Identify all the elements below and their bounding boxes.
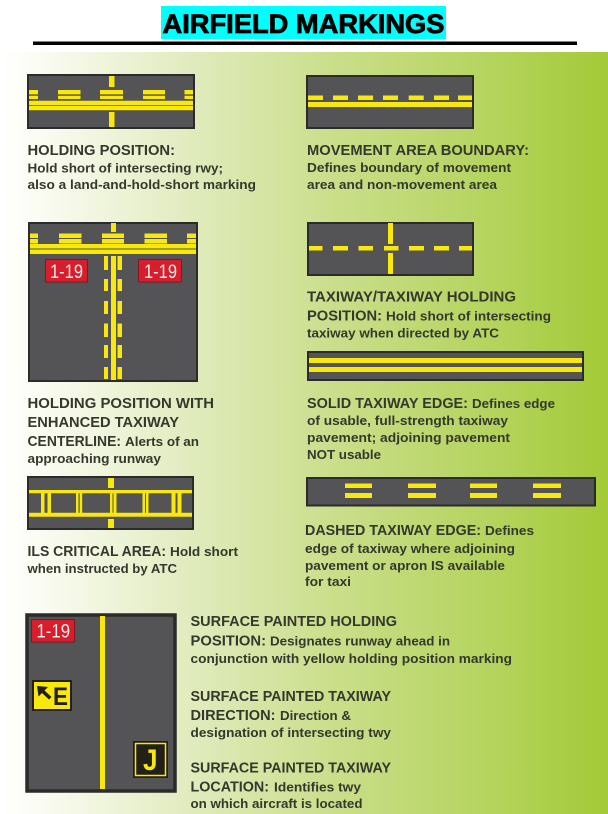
text: taxiway/taxiway holding position: TAXIWAY/TAXIWAY HOLDING [307,290,516,306]
marking diagram: solid taxiway edge [308,352,583,380]
text: movement area boundary: area and non-movement area [307,177,498,192]
marking diagram: enhanced taxiway centerline [29,223,197,381]
marking diagram: holding position [28,75,194,128]
text: solid taxiway edge: pavement; adjoining pavement [307,430,511,445]
text: taxiway/taxiway holding position [307,290,551,340]
text: movement area boundary [307,143,529,192]
title rule [33,42,577,45]
panel: taxiway/taxiway holding position [307,223,551,340]
sign: taxiway direction E: E [53,683,68,711]
panel: movement area boundary [307,76,529,192]
marking diagram: taxiway holding position [308,223,473,275]
text: movement area boundary: Defines boundary of movement [307,160,512,175]
text: surface painted taxiway direction: DIRECTION: [190,708,276,724]
panel: dashed taxiway edge [305,478,595,589]
text: surface painted taxiway direction: designation of intersecting twy [190,725,392,740]
sign: runway 1-19 left: 1-19 [50,261,83,283]
text: movement area boundary: MOVEMENT AREA BOUNDARY: [307,143,529,159]
text: taxiway/taxiway holding position: Hold short of intersecting [386,308,551,324]
text: holding position with enhanced taxiway centerline: ENHANCED TAXIWAY [28,415,179,431]
panel: holding position with enhanced taxiway centerline [28,223,214,466]
text: holding position: Hold short of intersecting rwy; [28,160,223,176]
text: solid taxiway edge: of usable, full-strength taxiway [307,413,509,428]
text: taxiway/taxiway holding position: taxiway when directed by ATC [307,326,500,340]
text: surface painted holding position: POSITION: [190,634,266,650]
text: holding position with enhanced taxiway centerline [28,396,214,466]
text: holding position [28,143,256,192]
marking diagram: dashed taxiway edge [307,478,595,506]
text: solid taxiway edge [307,396,555,462]
text: holding position with enhanced taxiway centerline: CENTERLINE: [28,434,121,450]
text: ILS critical area [26,544,239,576]
text: holding position with enhanced taxiway centerline: Alerts of an [125,434,199,449]
text: holding position: HOLDING POSITION: [28,143,175,159]
sign: taxiway location J: J [143,744,158,777]
marking diagram: movement area boundary [307,76,473,128]
text: surface painted holding position: SURFACE PAINTED HOLDING [190,614,397,630]
text: dashed taxiway edge [305,523,534,589]
title: AIRFIELD MARKINGS [162,9,444,39]
panel: surface painted markings [27,614,512,811]
diagram: surface painted markings [27,615,175,791]
taxiway centerline [100,616,105,789]
text: surface painted taxiway location: on which aircraft is located [190,796,363,811]
text: dashed taxiway edge: DASHED TAXIWAY EDGE: [305,523,481,539]
sign: taxiway direction E [33,681,71,711]
panel: solid taxiway edge [307,352,583,462]
text: dashed taxiway edge: pavement or apron IS available [305,558,505,573]
text: solid taxiway edge: SOLID TAXIWAY EDGE: [307,396,468,412]
text: ILS critical area: Hold short [170,544,239,559]
text: surface painted taxiway location: Identifies twy [274,780,362,794]
text: solid taxiway edge: NOT usable [307,447,381,462]
text: surface painted holding position [190,614,512,666]
text: holding position with enhanced taxiway centerline: approaching runway [28,451,162,466]
text: surface painted holding position: Designates runway ahead in [270,634,450,648]
text: holding position with enhanced taxiway centerline: HOLDING POSITION WITH [28,396,214,412]
panel: ILS critical area [26,477,239,576]
text: surface painted holding position: conjunction with yellow holding position marking [190,651,512,666]
text: holding position: also a land-and-hold-short marking [28,177,256,192]
sign: runway 1-19 right: 1-19 [144,261,177,283]
text: surface painted taxiway location: SURFACE PAINTED TAXIWAY [190,760,391,776]
panel: holding position [28,75,256,192]
sign: taxiway location J [133,741,168,778]
text: taxiway/taxiway holding position: POSITION: [307,308,382,324]
marking diagram: ILS critical area [28,477,193,529]
text: surface painted taxiway direction: SURFACE PAINTED TAXIWAY [190,689,391,705]
sign: surface painted holding position: 1-19 [36,620,70,642]
text: ILS critical area: when instructed by ATC [26,561,178,576]
text: ILS critical area: ILS CRITICAL AREA: [28,544,166,560]
text: solid taxiway edge: Defines edge [472,396,555,411]
text: dashed taxiway edge: for taxi [305,574,351,589]
text: dashed taxiway edge: Defines [485,523,534,538]
text: surface painted taxiway location [190,760,391,811]
text: surface painted taxiway direction [190,689,392,740]
text: surface painted taxiway direction: Direction & [280,708,351,723]
text: surface painted taxiway location: LOCATION: [190,780,269,796]
text: dashed taxiway edge: edge of taxiway where adjoining [305,541,515,556]
